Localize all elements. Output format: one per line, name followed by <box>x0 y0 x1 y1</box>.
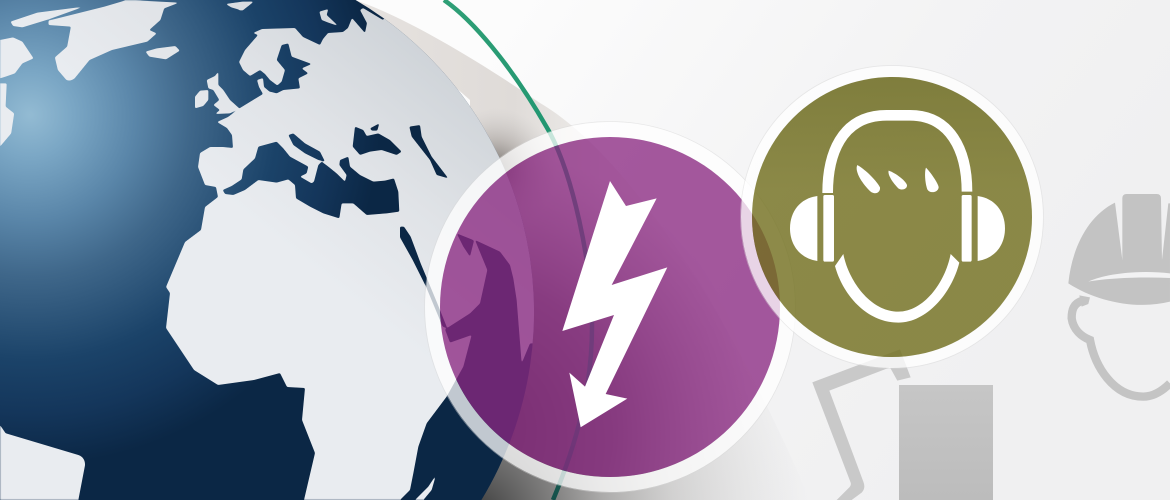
worker helmet <box>1068 194 1170 305</box>
grey worker figure <box>812 194 1170 500</box>
olive hearing protection badge <box>740 66 1044 368</box>
worker face outline <box>1072 295 1170 397</box>
sound drops <box>857 165 880 193</box>
worker body block <box>899 385 993 500</box>
icon: head with ear defenders <box>790 115 1005 323</box>
shadow fan behind globe <box>355 0 810 500</box>
ear bars <box>823 195 834 262</box>
purple warning badge <box>424 122 796 492</box>
headband <box>828 115 967 193</box>
olive translucent ring <box>746 72 1038 362</box>
ear cups <box>790 196 817 261</box>
purple disc <box>440 137 780 477</box>
olive disc <box>752 77 1032 357</box>
globe <box>0 0 534 500</box>
worker arm <box>812 349 911 500</box>
green arc <box>444 0 592 500</box>
chin line <box>835 254 959 323</box>
globe ocean <box>0 0 534 500</box>
icon: lightning bolt <box>562 181 667 427</box>
globe landmasses <box>0 0 534 500</box>
purple translucent ring <box>432 130 788 484</box>
